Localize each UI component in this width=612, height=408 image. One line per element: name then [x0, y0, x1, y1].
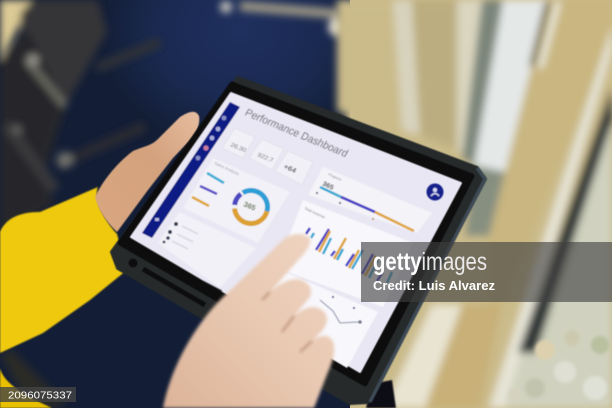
legend bars	[200, 173, 224, 186]
background: beige base wall	[350, 0, 612, 408]
panel: progress: 365	[321, 181, 335, 192]
panel: bar chart: Total revenue	[304, 206, 326, 219]
progress bar segments	[320, 187, 414, 231]
watermark logo: gettyimages	[373, 248, 487, 276]
dashboard title: Performance Dashboard	[243, 107, 350, 160]
left hand holding tablet	[95, 112, 199, 232]
avatar icon	[426, 184, 444, 200]
bars	[306, 228, 392, 283]
KPI card 1	[222, 128, 255, 158]
panel: bar chart	[277, 200, 413, 307]
donut chart: 365	[242, 200, 257, 213]
tablet case	[112, 78, 485, 403]
pointing right hand	[163, 234, 334, 408]
yellow sweater sleeve	[0, 187, 127, 408]
dark stand behind tablet	[366, 380, 396, 408]
KPI card 2: 922.7	[256, 152, 275, 164]
panel: progress: Progress	[328, 172, 342, 182]
image id tag	[0, 387, 76, 402]
image id tag: 2096075337	[8, 390, 72, 402]
KPI card 3	[275, 151, 313, 185]
background: blurred chair	[0, 0, 346, 408]
panel: list	[158, 212, 256, 291]
KPI card 3: +64	[282, 162, 298, 175]
background: beige door frame and window	[337, 0, 612, 408]
panel: donut summary	[183, 158, 290, 243]
panel: donut summary: Sales Analysis	[214, 161, 240, 176]
KPI card 1: 26.30	[229, 142, 248, 154]
panel: progress	[308, 167, 432, 233]
screen surface	[131, 93, 461, 372]
KPI card 2	[249, 139, 284, 170]
panel: line chart	[252, 272, 378, 368]
background: blurred flowers	[508, 330, 609, 402]
tablet screen: performance dashboard	[131, 93, 461, 372]
photo credit: Credit: Luis Alvarez	[373, 279, 495, 293]
sidebar	[142, 102, 240, 238]
getty images watermark band	[361, 242, 612, 302]
